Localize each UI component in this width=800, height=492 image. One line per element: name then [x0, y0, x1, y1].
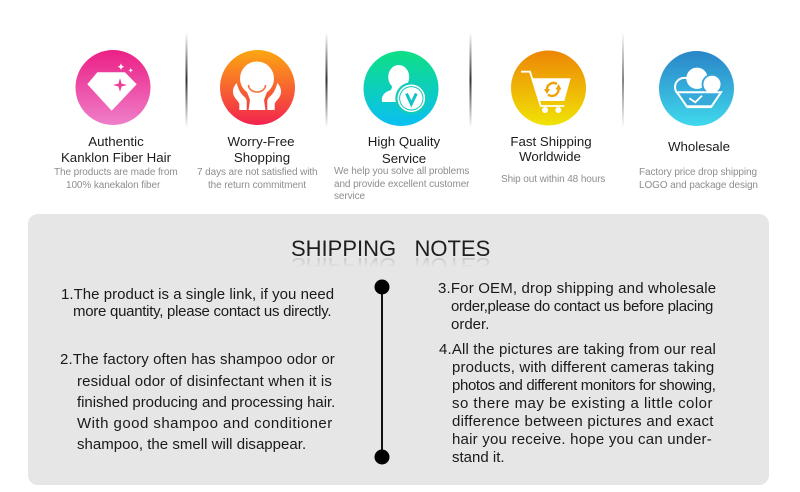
- icon: blue basket: [659, 51, 734, 126]
- icon: pink diamond: [76, 50, 150, 125]
- feature 1 text: 100% kanekalon fiber: [66, 180, 160, 191]
- panel: shipping notes: [28, 214, 769, 485]
- note 1: 1.The product is a single link, if you need: [61, 286, 334, 303]
- note 1: more quantity, please contact us directly.: [73, 303, 331, 320]
- feature 5 text: Wholesale: [668, 139, 730, 154]
- note 4: photos and different monitors for showing,: [452, 377, 716, 394]
- heading: shipping notes: SHIPPING NOTES: [291, 236, 490, 261]
- feature 2 text: Worry-Free: [228, 134, 294, 149]
- panel: shipping notes: SHIPPING NOTES: [291, 253, 490, 278]
- feature 1 text: The products are made from: [54, 167, 178, 178]
- note 4: difference between pictures and exact: [452, 413, 714, 430]
- feature 2 text: the return commitment: [208, 180, 306, 191]
- icon: yellow shopping cart: [511, 50, 586, 126]
- feature 1 text: Authentic: [88, 134, 144, 149]
- feature 5 text: LOGO and package design: [639, 180, 758, 191]
- feature 4 text: Worldwide: [519, 149, 581, 164]
- note 2: residual odor of disinfectant when it is: [77, 373, 332, 390]
- note 4: stand it.: [452, 449, 505, 466]
- note 4: 4.All the pictures are taking from our real: [439, 341, 716, 358]
- icon: orange smiling face in hands: [220, 50, 295, 125]
- note 2: finished producing and processing hair.: [77, 394, 335, 411]
- feature 3 text: High Quality: [368, 134, 440, 149]
- icon: green person with V badge: [364, 51, 438, 126]
- note 3: order,please do contact us before placing: [451, 298, 713, 315]
- note 4: hair you receive. hope you can under-: [452, 431, 712, 448]
- note 2: shampoo, the smell will disappear.: [77, 436, 306, 453]
- feature 4 text: Fast Shipping: [510, 134, 592, 149]
- timeline divider: [374, 280, 390, 464]
- feature 5 text: Factory price drop shipping: [639, 167, 757, 178]
- feature 4 text: Ship out within 48 hours: [501, 174, 605, 185]
- feature 3 text: Service: [382, 151, 426, 166]
- note 4: products, with different cameras taking: [452, 359, 714, 376]
- feature 3 text: We help you solve all problems: [334, 166, 469, 177]
- note 3: 3.For OEM, drop shipping and wholesale: [438, 280, 716, 297]
- feature 3 text: service: [334, 191, 365, 202]
- feature 2 text: Shopping: [234, 150, 290, 165]
- note 2: With good shampoo and conditioner: [77, 415, 333, 432]
- feature 3 text: and provide excellent customer: [334, 179, 469, 190]
- feature 2 text: 7 days are not satisfied with: [197, 167, 318, 178]
- note 3: order.: [451, 316, 489, 333]
- note 4: so there may be existing a little color: [452, 395, 713, 412]
- note 2: 2.The factory often has shampoo odor or: [60, 351, 335, 368]
- feature 1 text: Kanklon Fiber Hair: [61, 150, 171, 165]
